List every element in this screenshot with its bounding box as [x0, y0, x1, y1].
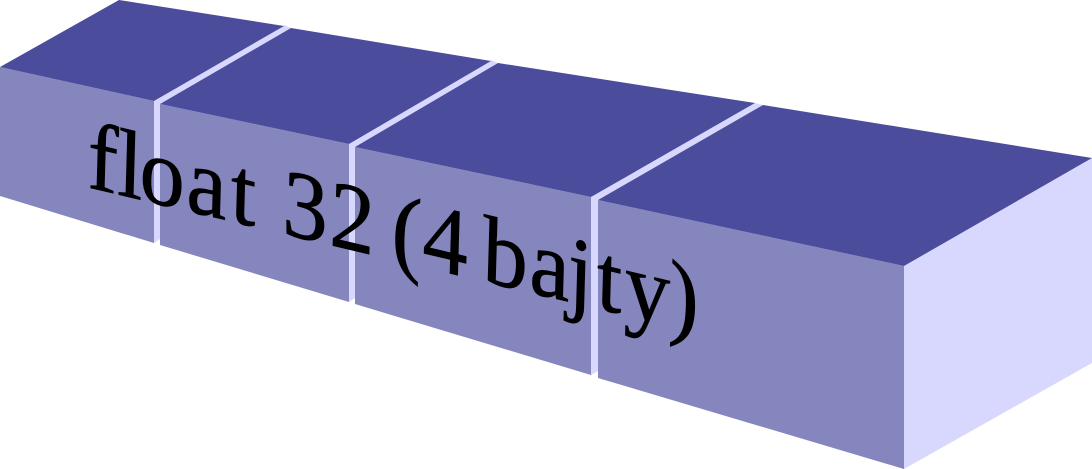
byte 2 — [160, 28, 491, 302]
right side face of the block — [904, 158, 1092, 469]
byte 3 — [355, 63, 755, 375]
byte dividers — [154, 25, 763, 375]
label: float 32 (4 bajty): float 32 (4 bajty) — [86, 102, 700, 354]
byte 4 — [598, 105, 1092, 469]
byte 1 — [0, 0, 284, 243]
